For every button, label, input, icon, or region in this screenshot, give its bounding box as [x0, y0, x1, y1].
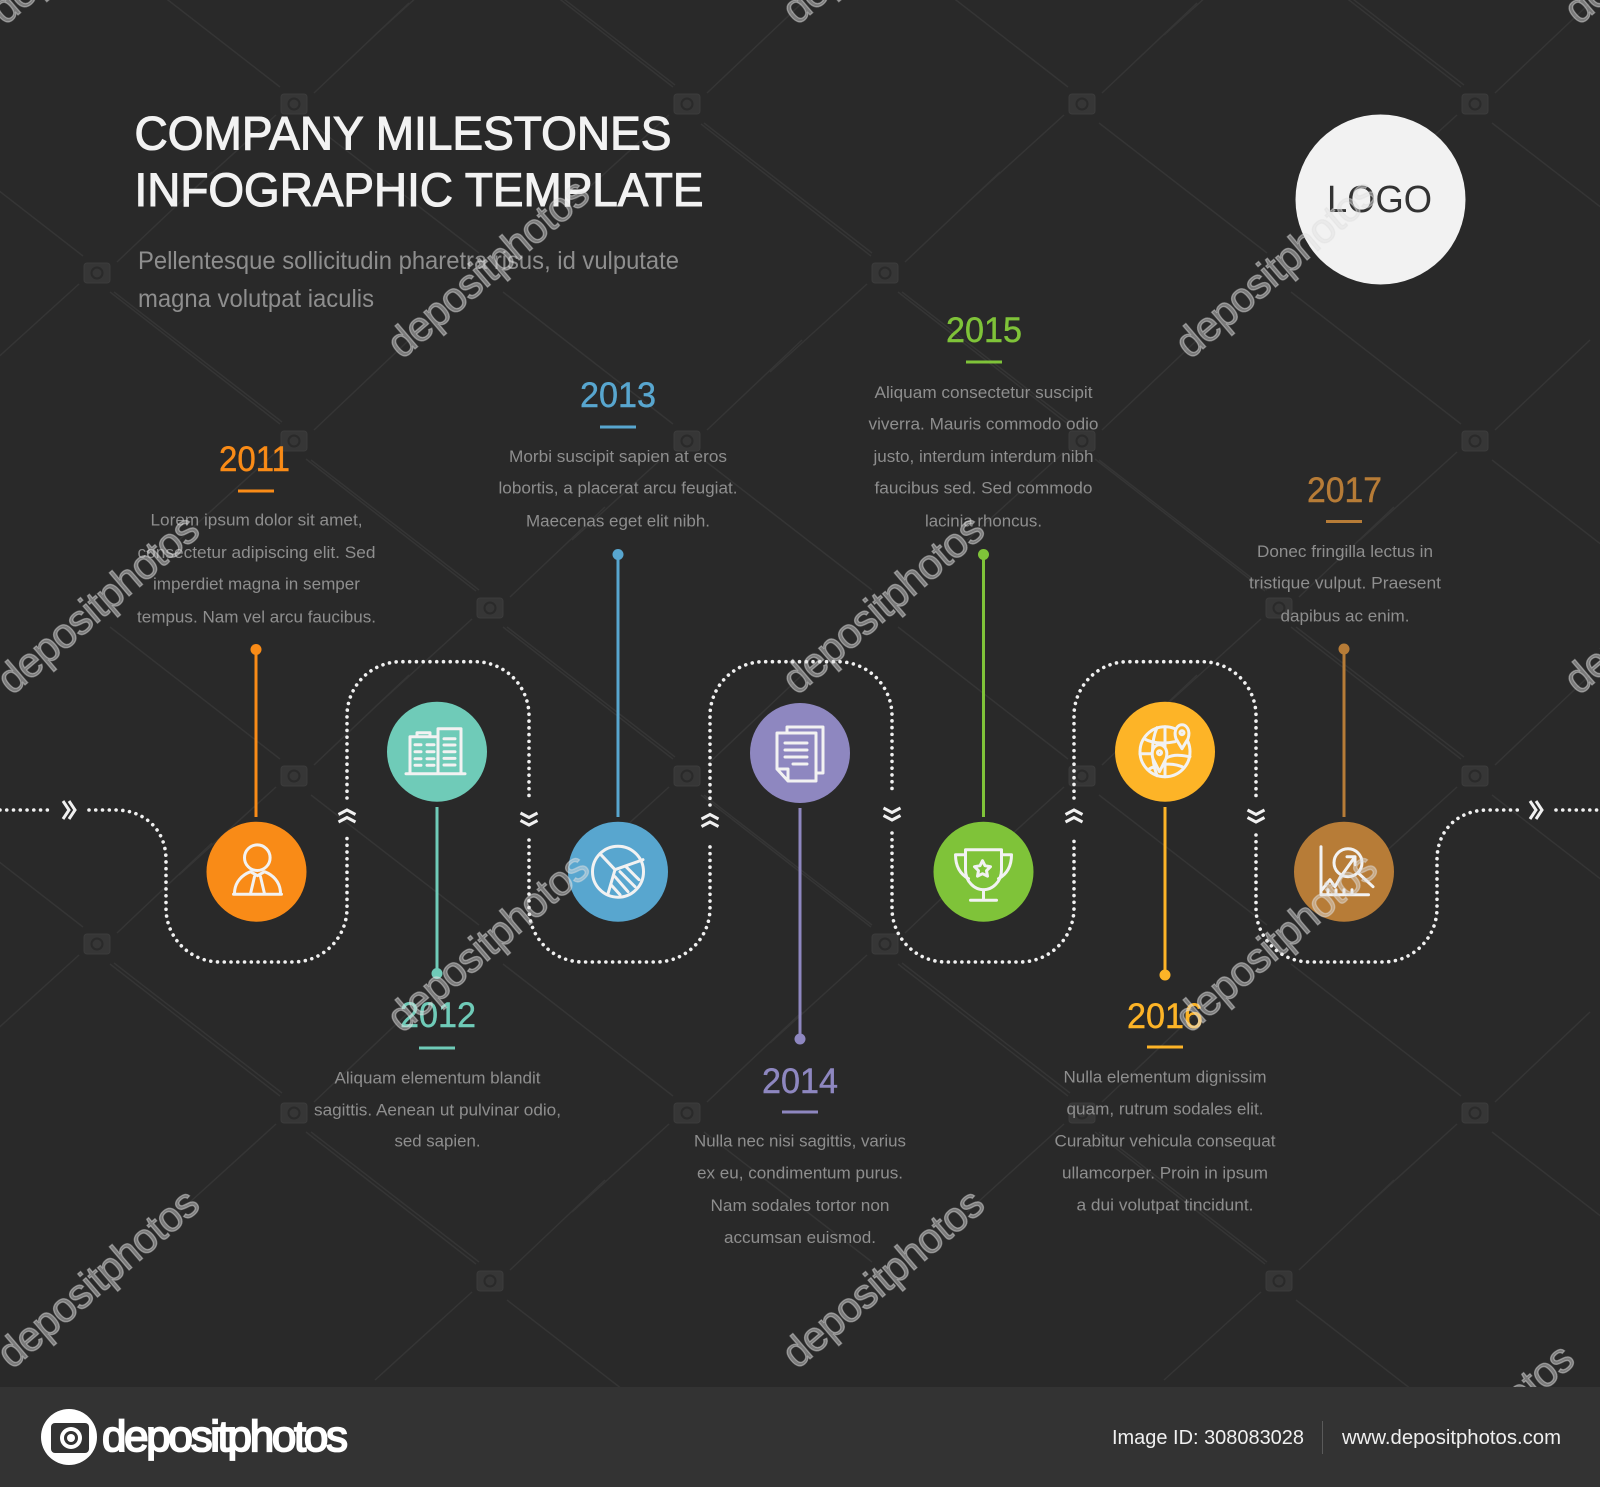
milestone 2011: imperdiet magna in semper: [153, 574, 360, 594]
icon: buildings: [406, 729, 465, 774]
milestone 2016: quam, rutrum sodales elit.: [1066, 1100, 1264, 1118]
milestone 2012: [314, 702, 561, 1150]
milestone 2016: Curabitur vehicula consequat: [1054, 1132, 1276, 1150]
depositphotos watermarks: depositphotos: [377, 169, 598, 367]
milestone 2013: Maecenas eget elit nibh.: [526, 512, 710, 530]
depositphotos watermarks: depositphotos: [772, 505, 993, 703]
icon: businessman: [234, 845, 282, 894]
footer bar: www.depositphotos.com: [1341, 1427, 1561, 1449]
subtitle: magna volutpat iaculis: [138, 285, 374, 313]
milestone 2011: consectetur adipiscing elit. Sed: [138, 543, 376, 562]
icon: trophy: [956, 850, 1012, 900]
milestone 2015: 2015: [946, 311, 1022, 350]
milestone 2017: dapibus ac enim.: [1280, 606, 1410, 626]
milestone 2014: Nam sodales tortor non: [710, 1196, 890, 1215]
milestone 2013: 2013: [580, 376, 656, 415]
milestone 2012: sed sapien.: [394, 1132, 480, 1150]
depositphotos watermarks: depositphotos: [1165, 843, 1386, 1041]
icon: pie chart: [592, 846, 644, 897]
title: INFOGRAPHIC TEMPLATE: [134, 163, 704, 216]
logo badge: LOGO: [1327, 179, 1432, 221]
milestone 2017: tristique vulput. Praesent: [1249, 574, 1441, 592]
depositphotos watermarks: depositphotos: [377, 843, 598, 1041]
depositphotos watermarks: depositphotos: [1165, 169, 1386, 367]
dotted timeline path: [0, 662, 1600, 962]
milestone 2016: ullamcorper. Proin in ipsum: [1062, 1164, 1268, 1182]
icon: chart analysis: [1321, 847, 1373, 895]
milestone 2016: [1054, 702, 1276, 1214]
icon: documents: [777, 727, 823, 781]
milestone 2016: 2016: [1127, 997, 1203, 1036]
milestone 2011: tempus. Nam vel arcu faucibus.: [137, 608, 376, 626]
milestone 2016: a dui volutpat tincidunt.: [1076, 1196, 1254, 1214]
title: COMPANY MILESTONES: [134, 106, 672, 160]
milestone 2011: Lorem ipsum dolor sit amet,: [150, 510, 362, 530]
icon: globe with pins: [1140, 725, 1190, 777]
milestone 2015: justo, interdum interdum nibh: [872, 447, 1094, 466]
milestone 2017: Donec fringilla lectus in: [1257, 542, 1433, 561]
footer bar: [0, 1387, 1600, 1487]
milestone 2013: lobortis, a placerat arcu feugiat.: [498, 478, 738, 498]
icon: depositphotos camera logo: [41, 1409, 97, 1465]
depositphotos watermarks: depositphotos: [772, 1179, 993, 1377]
milestone 2012: 2012: [400, 996, 476, 1035]
milestone 2013: Morbi suscipit sapien at eros: [509, 447, 727, 466]
milestone 2015: viverra. Mauris commodo odio: [868, 414, 1098, 434]
milestone 2014: Nulla nec nisi sagittis, varius: [694, 1132, 906, 1150]
milestone 2011: [137, 440, 376, 922]
milestone 2015: faucibus sed. Sed commodo: [874, 478, 1092, 498]
milestone 2015: Aliquam consectetur suscipit: [874, 383, 1093, 402]
milestone 2017: [1249, 471, 1441, 922]
milestone 2014: accumsan euismod.: [724, 1228, 876, 1247]
title: [134, 106, 704, 216]
footer bar: Image ID: 308083028: [1112, 1427, 1304, 1449]
milestone 2012: sagittis. Aenean ut pulvinar odio,: [314, 1100, 561, 1120]
milestone 2012: Aliquam elementum blandit: [334, 1068, 541, 1088]
subtitle: Pellentesque sollicitudin pharetra risus, id vulputate: [138, 247, 679, 275]
path chevrons: [63, 801, 1542, 826]
milestone 2015: lacinia rhoncus.: [925, 512, 1042, 530]
milestone 2014: ex eu, condimentum purus.: [697, 1164, 903, 1182]
milestone 2014: [694, 703, 906, 1247]
footer bar: depositphotos: [102, 1412, 348, 1461]
milestone 2017: 2017: [1307, 471, 1382, 510]
milestone 2014: 2014: [762, 1062, 838, 1101]
logo badge: [1296, 114, 1466, 284]
milestone 2013: [498, 376, 738, 922]
milestone 2015: [868, 311, 1098, 922]
milestone 2011: 2011: [219, 440, 290, 479]
milestone 2016: Nulla elementum dignissim: [1064, 1068, 1266, 1086]
subtitle: [138, 247, 679, 313]
